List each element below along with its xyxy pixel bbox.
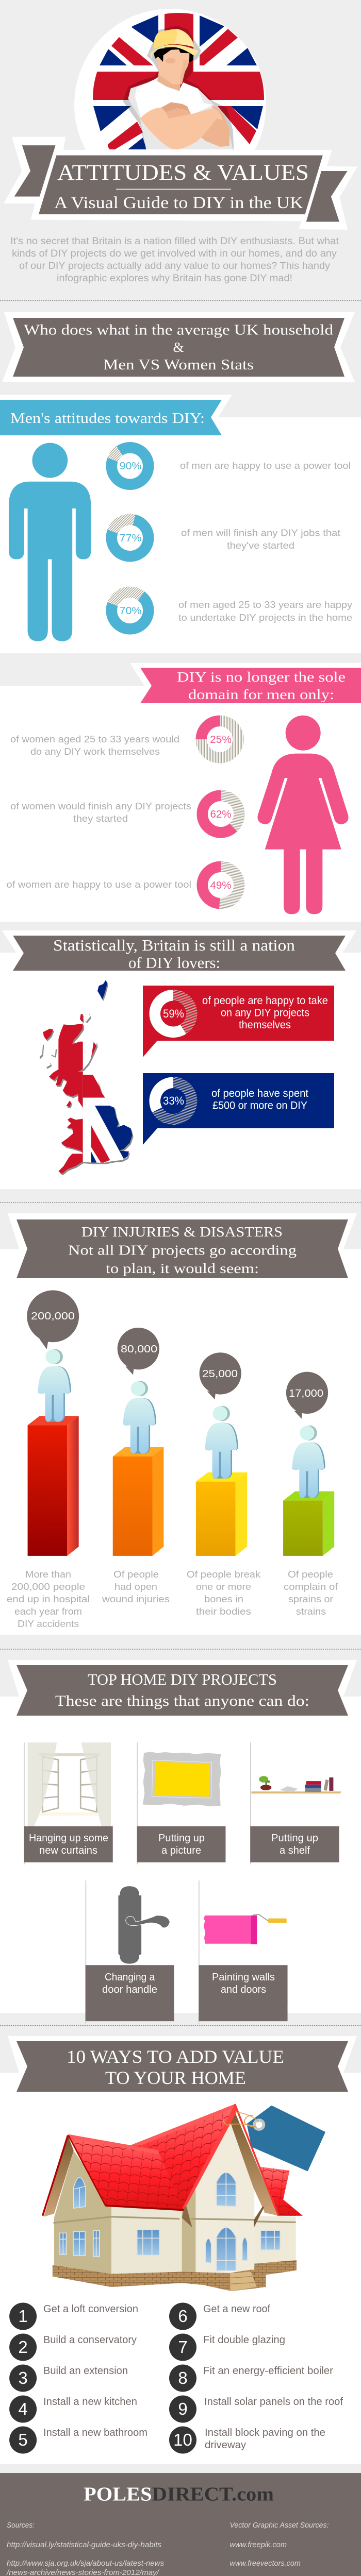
text: hospital label: each year from — [14, 1606, 82, 1617]
item 9 — [169, 2396, 343, 2422]
text: men finish jobs: they've started — [227, 540, 294, 551]
item 6 — [169, 2303, 270, 2330]
sources: http://visual.ly/statistical-guide-uks-diy-habits — [7, 2541, 161, 2549]
item 10: Install block paving on the — [205, 2427, 325, 2438]
item 10: 10 — [173, 2430, 192, 2449]
list: ways to add value, left column — [9, 2303, 147, 2453]
figure: person 3 — [205, 1406, 238, 1479]
text: men aged 25 to 33: to undertake DIY projects in the home — [178, 613, 352, 623]
item 1 — [9, 2303, 138, 2330]
item 5: 5 — [18, 2430, 28, 2449]
card: door handle — [86, 1880, 174, 2024]
vector sources — [230, 2521, 329, 2576]
text: hospital label: end up in hospital — [7, 1594, 90, 1604]
item 7: 7 — [178, 2337, 188, 2357]
item 1: 1 — [18, 2307, 28, 2326]
donut chart: 77% men finish jobs — [108, 516, 152, 560]
banner: 10 ways to add value: TO YOUR HOME — [105, 2067, 246, 2088]
item 1: Get a loft conversion — [43, 2303, 138, 2315]
banner: household men vs women: & — [173, 340, 184, 355]
text: men aged 25 to 33: of men aged 25 to 33 years are happy — [178, 600, 352, 610]
banner: top home DIY projects: TOP HOME DIY PROJECTS — [88, 1670, 277, 1688]
donut chart: 49% women: 49% — [210, 880, 232, 891]
sources — [6, 2521, 168, 2576]
card: shelf: Putting up — [271, 1833, 318, 1844]
bar: 17,000 — [283, 1492, 334, 1556]
map: UK in union jack colours — [39, 980, 136, 1176]
text: sprains label — [284, 1569, 338, 1617]
text: hospital label: 200,000 people — [11, 1582, 85, 1592]
text: women finish projects: of women would finish any DIY projects — [10, 801, 191, 811]
text: wound label — [102, 1569, 170, 1604]
item 2: Build a conservatory — [43, 2334, 137, 2346]
windows — [60, 2173, 280, 2271]
text: women aged 25 to 33: of women aged 25 to 33 years would — [10, 734, 179, 744]
donut chart: 62% women: 62% — [210, 809, 232, 820]
banner: men's attitudes: Men's attitudes towards DIY: — [10, 410, 205, 427]
banner: top home DIY projects: These are things that anyone can do: — [55, 1692, 309, 1709]
banner: 10 ways to add value: 10 WAYS TO ADD VALUE — [67, 2046, 284, 2067]
donut chart: 70% men aged 25 to 33: 70% — [120, 605, 142, 617]
stat: 200,000: 200,000 — [31, 1311, 75, 1322]
banner: household men vs women — [2, 312, 355, 382]
donut chart: 49% women — [201, 866, 240, 905]
banner: DIY injuries and disasters — [8, 1213, 357, 1278]
text: hospital label: More than — [25, 1569, 71, 1580]
text: bones label: Of people break — [187, 1569, 261, 1580]
donut chart: 25% women — [201, 721, 238, 758]
callout: 33% spent 500 pounds: 33% — [163, 1094, 184, 1107]
card: painting — [199, 1880, 288, 2024]
text block: introduction: It's no secret that Britain is a nation filled with DIY enthusiasts. But what — [10, 236, 339, 247]
text: bones label: their bodies — [196, 1606, 251, 1617]
card: picture: a picture — [161, 1845, 201, 1856]
panel: project cards — [24, 1742, 341, 2024]
figure: person 2 — [123, 1381, 156, 1454]
callout: 59% take on DIY projects: themselves — [239, 1019, 291, 1031]
card: curtains: Hanging up some — [29, 1833, 108, 1844]
bar: 80,000 — [113, 1447, 163, 1556]
item 8: 8 — [178, 2368, 188, 2387]
item 6: 6 — [178, 2307, 188, 2326]
banner: DIY not only for men — [130, 663, 361, 703]
text: bones label: bones in — [204, 1594, 243, 1604]
text: women aged 25 to 33: do any DIY work themselves — [30, 747, 160, 757]
item 4: Install a new kitchen — [43, 2396, 137, 2408]
illustration: builder on union jack circle — [74, 9, 266, 150]
banner: men's attitudes — [0, 395, 232, 435]
item 10 — [169, 2427, 325, 2453]
figure: person 4 — [292, 1426, 325, 1498]
text: sprains label: Of people — [288, 1569, 333, 1580]
banner: household men vs women: Men VS Women Stats — [103, 357, 254, 373]
banner: DIY not only for men: domain for men only: — [188, 687, 334, 702]
callout: 59% take on DIY projects — [143, 986, 334, 1057]
text: bones label — [187, 1569, 261, 1617]
text: bones label: one or more — [196, 1582, 251, 1592]
callout: 33% spent 500 pounds — [143, 1073, 334, 1145]
banner: DIY injuries and disasters: Not all DIY projects go according — [68, 1243, 297, 1258]
banner: household men vs women: Who does what in the average UK household — [24, 321, 334, 338]
card: door handle: door handle — [102, 1984, 157, 1995]
text: wound label: wound injuries — [102, 1594, 170, 1604]
item 4 — [9, 2396, 137, 2422]
bar chart: injuries with figures — [27, 1290, 334, 1556]
text block: introduction: kinds of DIY projects do we get involved with in our homes, and do any — [12, 248, 337, 259]
banner: Britain is a nation of DIY lovers: of DIY lovers: — [128, 954, 220, 972]
item 2 — [9, 2334, 137, 2361]
banner: 10 ways to add value — [8, 2036, 357, 2092]
sources: http://www.sja.org.uk/sja/about-us/latest-news — [7, 2560, 164, 2568]
text block: introduction: of our DIY projects actually add any value to our homes? This handy — [19, 261, 331, 272]
card: curtains — [24, 1742, 113, 1865]
roof — [43, 2104, 278, 2216]
banner: DIY injuries and disasters: to plan, it would seem: — [106, 1261, 259, 1276]
stat: 25,000: 25,000 — [202, 1368, 238, 1380]
item 3: 3 — [18, 2368, 28, 2387]
text: men aged 25 to 33 — [178, 600, 352, 623]
text: hospital label — [7, 1569, 90, 1629]
panel: header — [4, 9, 357, 284]
tag — [223, 2106, 324, 2171]
sources: Sources: — [7, 2521, 35, 2530]
bar: 25,000 — [196, 1472, 247, 1556]
banner: Britain is a nation of DIY lovers — [2, 930, 356, 976]
callout: 59% take on DIY projects: on any DIY projects — [221, 1007, 309, 1019]
card: picture — [137, 1742, 225, 1865]
card: curtains: new curtains — [39, 1845, 97, 1856]
list: ways to add value, right column — [169, 2303, 343, 2453]
text: sprains label: complain of — [284, 1582, 338, 1592]
item 7 — [169, 2334, 285, 2361]
text: men power tool: of men are happy to use a power tool — [180, 461, 351, 471]
text: sprains label: strains — [296, 1606, 326, 1617]
card: shelf — [250, 1742, 341, 1865]
title ribbon — [4, 137, 357, 230]
banner: DIY not only for men: DIY is no longer the sole — [177, 669, 346, 685]
text: hospital label: DIY accidents — [18, 1619, 79, 1629]
card: picture: Putting up — [158, 1833, 205, 1844]
item 5 — [9, 2427, 147, 2453]
item 9: Install solar panels on the roof — [204, 2396, 343, 2408]
text: sprains label: sprains or — [288, 1594, 333, 1604]
heading: title: ATTITUDES & VALUES — [57, 161, 309, 185]
vector sources: www.freepik.com — [230, 2541, 287, 2549]
icon: woman figure — [257, 716, 349, 914]
text: women finish projects: they started — [73, 814, 128, 824]
vector sources: Vector Graphic Asset Sources: — [230, 2521, 329, 2530]
donut chart: 77% men finish jobs: 77% — [120, 533, 142, 544]
heading: subtitle: A Visual Guide to DIY in the UK — [54, 194, 303, 212]
icon: man figure — [9, 443, 91, 641]
callout: 59% take on DIY projects: of people are happy to take — [202, 995, 328, 1007]
item 6: Get a new roof — [203, 2303, 270, 2315]
item 9: 9 — [178, 2399, 188, 2418]
donut chart: 90% men power tool: 90% — [120, 461, 142, 472]
card: painting: and doors — [221, 1984, 266, 1995]
text block: introduction — [10, 236, 339, 284]
figure: person 1 — [38, 1349, 71, 1422]
item 7: Fit double glazing — [203, 2334, 285, 2346]
stat: 17,000: 17,000 — [289, 1388, 323, 1399]
item 3: Build an extension — [43, 2365, 128, 2377]
text: wound label: had open — [114, 1582, 157, 1592]
callout: 33% spent 500 pounds: of people have spent — [211, 1088, 308, 1099]
donut chart: 62% women — [194, 788, 247, 840]
card: painting: Painting walls — [212, 1972, 275, 1983]
text: women finish projects — [10, 801, 191, 824]
donut chart: 70% men aged 25 to 33 — [104, 585, 156, 636]
item 3 — [9, 2365, 128, 2392]
card: door handle: Changing a — [105, 1972, 155, 1983]
text: men finish jobs: of men will finish any DIY jobs that — [181, 528, 340, 538]
item 2: 2 — [18, 2337, 28, 2357]
text: wound label: Of people — [113, 1569, 159, 1580]
bar: 200,000 — [28, 1416, 79, 1556]
item 4: 4 — [18, 2399, 28, 2418]
donut chart: 90% men power tool — [104, 440, 156, 492]
card: shelf: a shelf — [280, 1845, 310, 1856]
stat: 80,000: 80,000 — [121, 1344, 157, 1355]
item 8: Fit an energy-efficient boiler — [203, 2365, 333, 2377]
vector sources: www.freevectors.com — [230, 2560, 301, 2568]
text block: introduction: infographic explores why Britain has gone DIY mad! — [57, 273, 292, 284]
text: men finish jobs — [181, 528, 340, 551]
panel: footer — [0, 2473, 361, 2576]
callout: 33% spent 500 pounds: £500 or more on DIY — [212, 1099, 307, 1112]
brick base — [53, 2260, 297, 2291]
callout: 59% take on DIY projects: 59% — [163, 1007, 184, 1020]
speech bubble: shapes — [27, 1290, 328, 1419]
item 10: driveway — [205, 2439, 247, 2451]
item 8 — [169, 2365, 333, 2392]
logo: POLESDIRECT.com — [84, 2483, 274, 2505]
text: women aged 25 to 33 — [10, 734, 179, 757]
illustration: house with price tag — [43, 2104, 324, 2291]
item 5: Install a new bathroom — [43, 2427, 147, 2438]
banner: DIY injuries and disasters: DIY INJURIES & DISASTERS — [81, 1224, 283, 1240]
donut chart: 25% women: 25% — [210, 734, 232, 745]
banner: Britain is a nation of DIY lovers: Statistically, Britain is still a nation — [53, 936, 296, 954]
text: women power tool: of women are happy to use a power tool — [6, 879, 191, 890]
banner: top home DIY projects — [8, 1660, 357, 1716]
